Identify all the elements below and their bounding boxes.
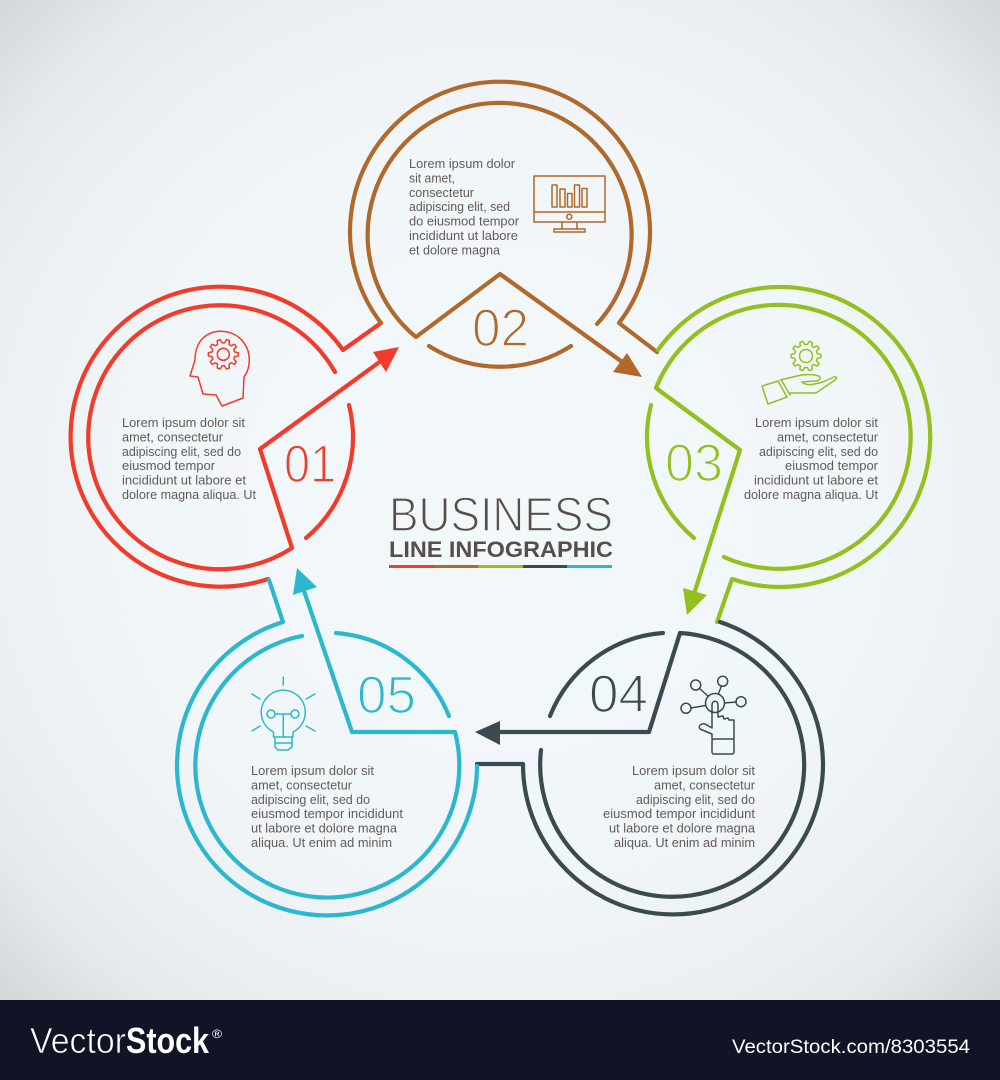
text block 04: amet, consectetur <box>654 777 756 792</box>
text block 02 <box>409 156 520 257</box>
panel: step 05 teal <box>177 568 477 915</box>
text block 01: Lorem ipsum dolor sit <box>122 415 245 430</box>
text block 03: Lorem ipsum dolor sit <box>755 415 878 430</box>
text block 05: Lorem ipsum dolor sit <box>251 763 374 778</box>
footer bar <box>0 1000 1000 1080</box>
icon: head with gear <box>190 331 249 406</box>
number arc 02 <box>429 346 571 367</box>
text block 02: incididunt ut labore <box>409 228 518 243</box>
panel: step 04 dark <box>475 622 823 914</box>
text block 03 <box>744 415 879 502</box>
text block 04: eiusmod tempor incididunt <box>603 806 755 821</box>
text block 03: incididunt ut labore et <box>754 473 878 488</box>
text block 04: aliqua. Ut enim ad minim <box>614 835 755 850</box>
number 05: 05 <box>357 666 416 725</box>
text block 02: sit amet, <box>409 170 455 185</box>
text block 05 <box>251 763 403 850</box>
text block 05: eiusmod tempor incididunt <box>251 806 403 821</box>
text block 03: amet, consectetur <box>777 429 879 444</box>
text block 05: aliqua. Ut enim ad minim <box>251 835 392 850</box>
heading: BUSINESS: BUSINESS <box>389 489 613 542</box>
text block 03: adipiscing elit, sed do <box>759 444 878 459</box>
text block 02: et dolore magna <box>409 242 501 257</box>
inner ring with arrow 04 <box>495 633 804 897</box>
number 02: 02 <box>472 299 529 358</box>
text block 02: Lorem ipsum dolor <box>409 156 516 171</box>
text block 03: eiusmod tempor <box>785 458 879 473</box>
text block 01: amet, consectetur <box>122 429 224 444</box>
text block 01: dolore magna aliqua. Ut <box>122 487 256 502</box>
text block 02: adipiscing elit, sed <box>409 199 510 214</box>
arrowhead 04 <box>475 721 500 745</box>
arrowhead 05 <box>293 568 317 595</box>
outer ring 05 <box>177 580 477 915</box>
text block 01: adipiscing elit, sed do <box>122 444 241 459</box>
number arc 04 <box>550 633 663 716</box>
text block 05: ut labore et dolore magna <box>251 821 398 836</box>
icon: touch network <box>681 676 746 754</box>
arrowhead 01 <box>373 347 399 372</box>
text block 01: eiusmod tempor <box>122 458 216 473</box>
title block <box>389 489 613 568</box>
panel: step 01 red <box>71 287 399 587</box>
footer logo: Stock <box>126 1020 210 1061</box>
panel: step 02 brown <box>350 82 657 377</box>
number 01: 01 <box>284 435 336 494</box>
arrowhead 03 <box>683 588 707 615</box>
outer ring 03 <box>658 287 930 622</box>
footer logo <box>30 1020 222 1061</box>
text block 01: incididunt ut labore et <box>122 473 246 488</box>
icon: monitor with bar chart <box>534 176 605 232</box>
icon: light bulb <box>252 677 315 750</box>
inner ring with arrow 05 <box>195 588 459 898</box>
number arc 05 <box>336 633 449 716</box>
inner ring with arrow 02 <box>368 103 632 364</box>
footer id: VectorStock.com/8303554 <box>732 1037 970 1058</box>
number arc 03 <box>647 405 694 538</box>
text block 05: amet, consectetur <box>251 777 353 792</box>
text block 05: adipiscing elit, sed do <box>251 792 370 807</box>
text block 04: Lorem ipsum dolor sit <box>632 763 755 778</box>
number 03: 03 <box>665 434 723 493</box>
text block 04: adipiscing elit, sed do <box>636 792 755 807</box>
colour bar <box>389 565 612 568</box>
text block 01 <box>122 415 256 502</box>
footer logo: Vector <box>30 1020 126 1061</box>
icon: hand holding gear <box>762 341 836 404</box>
text block 04: ut labore et dolore magna <box>609 821 756 836</box>
subheading: LINE INFOGRAPHIC: LINE INFOGRAPHIC <box>389 537 613 562</box>
text block 04 <box>603 763 756 850</box>
outer ring 01 <box>71 287 381 587</box>
outer ring 02 <box>350 82 657 352</box>
number 04: 04 <box>589 665 648 724</box>
text block 03: dolore magna aliqua. Ut <box>744 487 878 502</box>
inner ring with arrow 03 <box>656 305 911 597</box>
text block 02: do eiusmod tempor <box>409 214 520 229</box>
inner ring with arrow 01 <box>88 305 385 569</box>
arrowhead 02 <box>613 353 642 377</box>
outer ring 04 <box>477 622 823 914</box>
text block 02: consectetur <box>409 185 475 200</box>
number arc 01 <box>306 405 353 538</box>
footer logo: ® <box>212 1027 222 1041</box>
panel: step 03 green <box>647 287 930 622</box>
